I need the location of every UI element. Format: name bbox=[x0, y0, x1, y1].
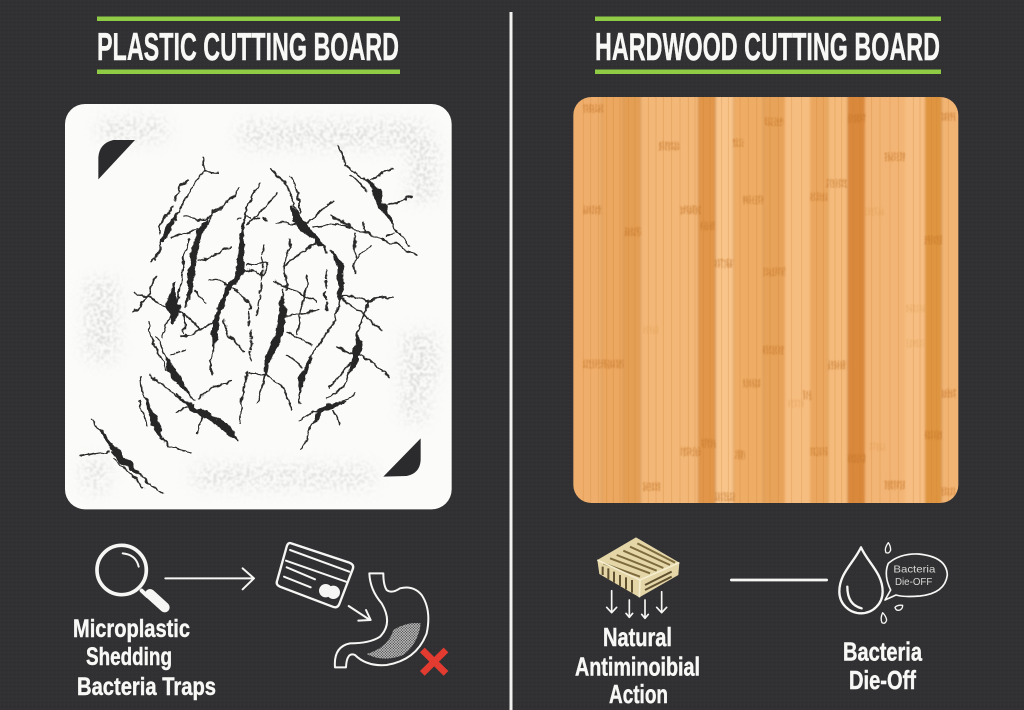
icon: magnifying glass bbox=[97, 545, 165, 607]
text: microplastic shedding bacteria traps: Bacteria Traps bbox=[77, 673, 216, 701]
icon: splash droplets bbox=[881, 543, 903, 623]
connector line bbox=[731, 576, 827, 584]
wood stripes bbox=[563, 90, 965, 510]
text: bacteria die-off: Die-Off bbox=[849, 665, 916, 695]
heading: plastic cutting board bbox=[97, 16, 400, 74]
arrow: card to stomach bbox=[349, 606, 371, 621]
arrow: magnifier to card bbox=[165, 568, 254, 589]
corner cutout: bottom right bbox=[383, 438, 421, 477]
text: natural antimicrobial action bbox=[575, 622, 700, 709]
speech bubble: bacteria die-off bbox=[885, 554, 947, 600]
icon: stomach bbox=[335, 573, 428, 667]
icon: red cross bbox=[422, 650, 446, 673]
scratches and cracks bbox=[82, 147, 417, 494]
text: bacteria die-off bbox=[843, 636, 922, 695]
icon: wood block bbox=[597, 537, 679, 597]
text: microplastic shedding bacteria traps: Shedding bbox=[86, 643, 172, 671]
right icon row: natural action bbox=[597, 537, 947, 623]
text: microplastic shedding bacteria traps: Microplastic bbox=[73, 615, 190, 643]
text: microplastic shedding bacteria traps bbox=[73, 615, 216, 701]
wood grain bbox=[583, 97, 948, 503]
icon: downward arrows bbox=[607, 591, 667, 618]
icon: water drop bbox=[839, 547, 883, 613]
icon: plastic card bbox=[277, 543, 353, 607]
text: natural antimicrobial action: Antiminoibial bbox=[575, 652, 700, 682]
panel: cracked plastic board bbox=[65, 104, 452, 509]
left icon row: microplastic pathway bbox=[97, 543, 446, 673]
bamboo nodes bbox=[583, 108, 957, 497]
corner cutout: top left bbox=[98, 140, 135, 179]
text: natural antimicrobial action: Action bbox=[609, 679, 668, 709]
heading: plastic cutting board: PLASTIC CUTTING BOARD bbox=[97, 26, 399, 69]
panel: bamboo hardwood board bbox=[563, 90, 965, 510]
text: bacteria die-off: Bacteria bbox=[843, 636, 922, 666]
speech bubble: bacteria die-off: Bacteria bbox=[893, 564, 936, 575]
text: natural antimicrobial action: Natural bbox=[603, 622, 672, 652]
speech bubble: bacteria die-off: Die-OFF bbox=[895, 577, 932, 588]
center divider bbox=[510, 12, 512, 710]
heading: hardwood cutting board bbox=[595, 16, 941, 74]
